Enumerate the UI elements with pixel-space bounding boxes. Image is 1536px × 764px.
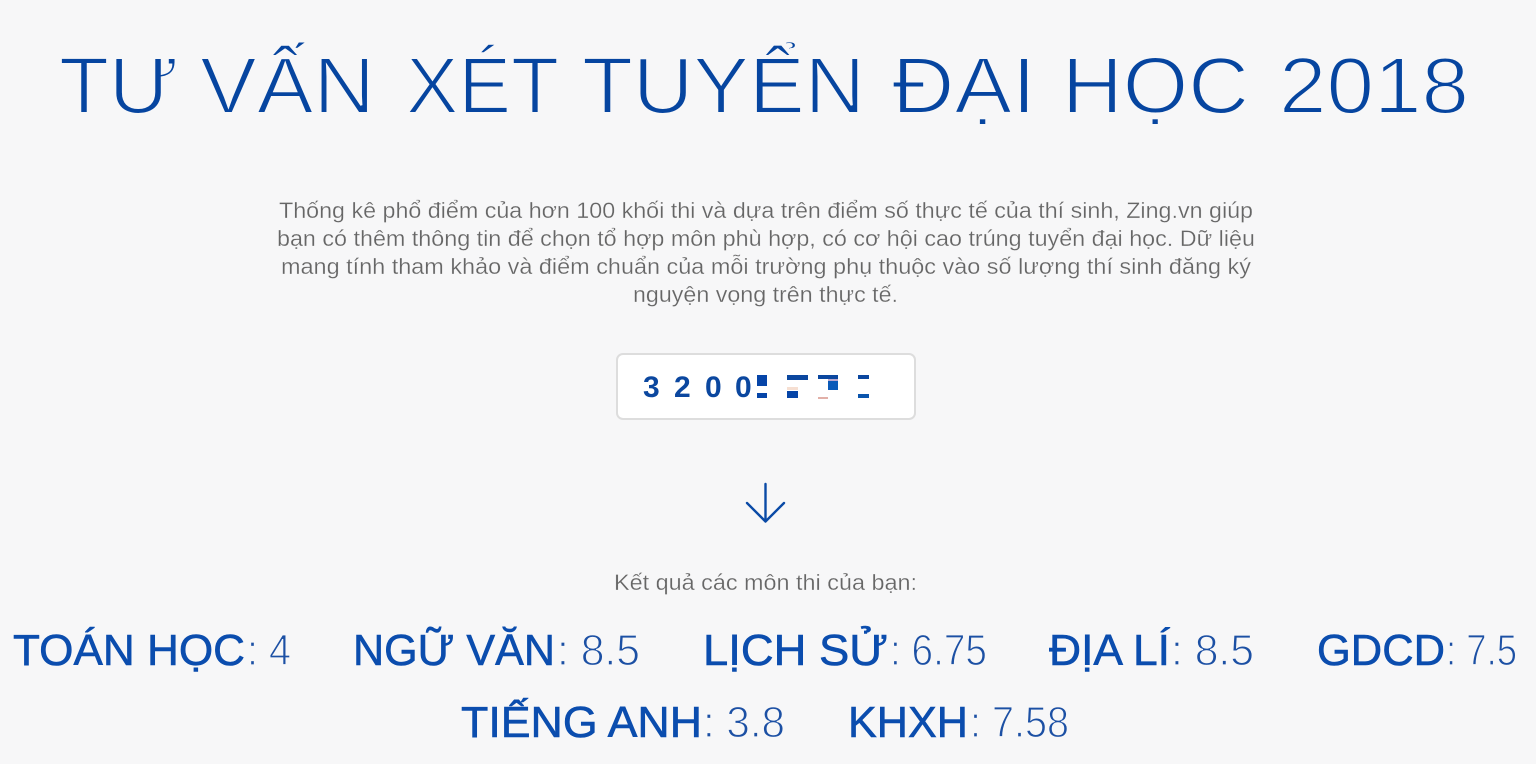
score: KHXH: : 7.58 [970, 698, 1069, 747]
title: 2018 [1279, 41, 1469, 130]
score: Lịch sử: LỊCH SỬ [703, 624, 888, 675]
icon: down arrow [747, 484, 784, 522]
candidate number digits: 3200 [643, 371, 752, 404]
input box: candidate number [617, 354, 915, 419]
title: XÉT [406, 41, 559, 130]
score: Địa lí [1049, 626, 1254, 675]
intro paragraph: bạn có thêm thông tin để chọn tổ hợp môn phù hợp, có cơ hội cao trúng tuyển đại học. Dữ liệu [277, 226, 1255, 251]
score: GDCD: GDCD [1317, 626, 1445, 675]
score: GDCD: : 7.5 [1446, 626, 1517, 675]
title: ĐẠI [892, 41, 1036, 130]
score: Ngữ văn: : 8.5 [557, 626, 640, 675]
title: HỌC [1062, 41, 1249, 130]
title: VẤN [200, 41, 375, 130]
score: Toán học: : 4 [247, 626, 291, 675]
glitched digit blocks [757, 375, 869, 399]
score: GDCD [1317, 626, 1517, 675]
score: Lịch sử: : 6.75 [890, 626, 987, 675]
score: Tiếng Anh: TIẾNG ANH [461, 697, 702, 747]
score: Địa lí: ĐỊA LÍ [1049, 626, 1171, 675]
intro paragraph: Thống kê phổ điểm của hơn 100 khối thi và dựa trên điểm số thực tế của thí sinh, Zing.vn giúp [279, 198, 1253, 223]
score: Tiếng Anh: : 3.8 [703, 698, 785, 747]
title: TUYỂN [582, 41, 865, 130]
title [59, 41, 1469, 130]
score: Toán học: TOÁN HỌC [13, 626, 245, 675]
intro paragraph: mang tính tham khảo và điểm chuẩn của mỗi trường phụ thuộc vào số lượng thí sinh đăng ký [281, 254, 1251, 279]
intro paragraph [277, 198, 1255, 307]
score: KHXH [848, 698, 1069, 747]
score: Lịch sử [703, 624, 987, 675]
title: TƯ [59, 41, 179, 130]
results caption: Kết quả các môn thi của bạn: [614, 570, 917, 595]
score: Ngữ văn: NGỮ VĂN [353, 625, 555, 675]
score: Địa lí: : 8.5 [1171, 626, 1254, 675]
score: KHXH: KHXH [848, 698, 968, 747]
intro paragraph: nguyện vọng trên thực tế. [633, 282, 898, 307]
